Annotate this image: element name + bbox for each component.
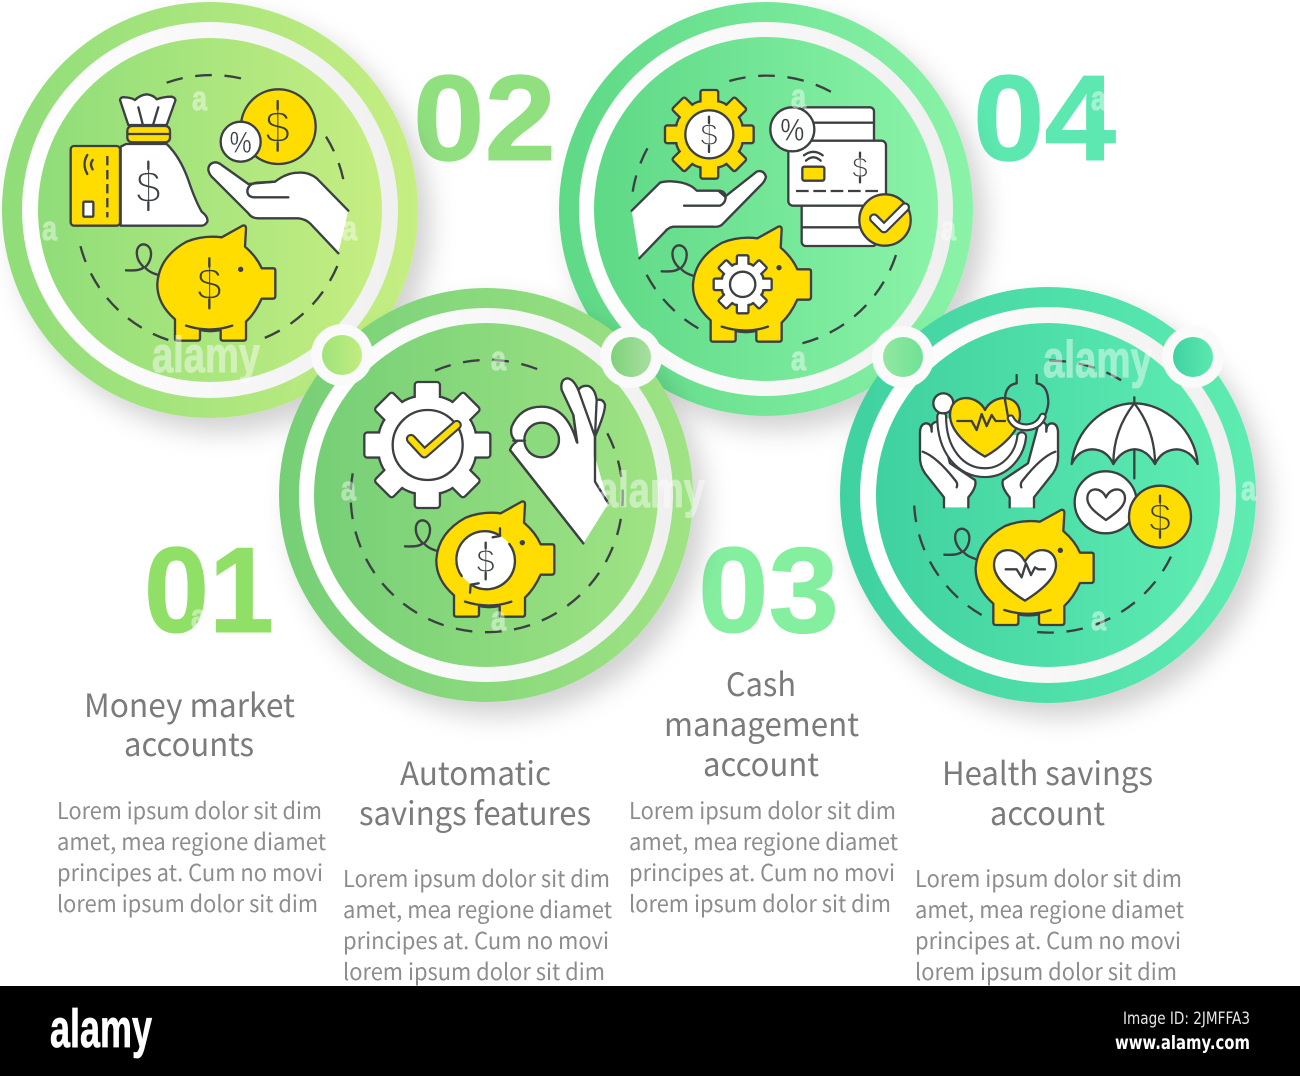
- text block: column 1: amet, mea regione diamet: [57, 823, 326, 857]
- watermarks: a: [491, 600, 507, 638]
- heading: money market accounts: Money market: [84, 681, 295, 727]
- icon: gear with check, OK hand, piggy bank: $: [476, 544, 495, 581]
- number 03: 03: [698, 522, 839, 658]
- watermarks: a: [1091, 600, 1107, 638]
- icon: gear with check, OK hand, piggy bank: [351, 360, 623, 632]
- text block: column 2: lorem ipsum dolor sit dim: [343, 953, 605, 987]
- text block: column 3: lorem ipsum dolor sit dim: [629, 885, 891, 919]
- footer image id: Image ID: 2JMFFA3: [1123, 1009, 1250, 1029]
- watermarks: a: [491, 340, 507, 378]
- text block: column 3: Lorem ipsum dolor sit dim: [629, 792, 896, 826]
- footer website: www.alamy.com: [1115, 1032, 1250, 1054]
- number 01: 01: [144, 522, 274, 658]
- connector dot: 4 end: [1162, 326, 1224, 388]
- text block: column 1: [57, 792, 326, 919]
- text block: column 3: principes at. Cum no movi: [629, 854, 895, 888]
- icon: savings, bag, card, coin, hand, piggy bank: $: [265, 102, 290, 153]
- connector dot: 1 to 2: [311, 324, 373, 386]
- text block: column 2: Lorem ipsum dolor sit dim: [343, 860, 610, 894]
- heading: health savings account: [942, 749, 1153, 835]
- heading: automatic savings features: Automatic: [400, 749, 551, 795]
- icon: savings, bag, card, coin, hand, piggy bank: $: [136, 161, 161, 212]
- text block: column 4: lorem ipsum dolor sit dim: [915, 953, 1177, 987]
- icon: savings, bag, card, coin, hand, piggy bank: %: [230, 126, 252, 159]
- panel: cash management account circle: [559, 2, 973, 416]
- icon: gear, hand, cards, piggy bank: %: [780, 112, 804, 148]
- text block: column 1: lorem ipsum dolor sit dim: [57, 885, 318, 919]
- heading: cash management account: account: [703, 740, 819, 786]
- watermarks: a: [1091, 80, 1107, 118]
- footer bar: [0, 986, 1300, 1076]
- icon: gear, hand, cards, piggy bank: $: [852, 153, 868, 185]
- watermarks: alamy: [152, 327, 260, 383]
- text block: column 4: Lorem ipsum dolor sit dim: [915, 860, 1182, 894]
- icon: hands, heart, stethoscope, umbrella, coins, piggy bank: $: [1149, 496, 1171, 540]
- text block: column 1: principes at. Cum no movi: [57, 854, 323, 888]
- connector dot: 3 to 4: [872, 326, 934, 388]
- text block: column 4: [915, 860, 1184, 987]
- panel: automatic savings features circle: [279, 288, 693, 702]
- heading: money market accounts: [84, 681, 295, 766]
- heading: cash management account: management: [664, 700, 859, 746]
- text block: column 2: [343, 860, 612, 987]
- text block: column 3: [629, 792, 898, 919]
- panel: health savings account circle: [840, 287, 1256, 703]
- panel: money market accounts circle: [2, 2, 418, 418]
- watermarks: alamy: [597, 462, 705, 518]
- watermarks: a: [341, 470, 357, 508]
- text block: column 2: amet, mea regione diamet: [343, 891, 612, 925]
- heading: money market accounts: accounts: [124, 720, 254, 766]
- icon: savings, bag, card, coin, hand, piggy bank: [71, 75, 348, 341]
- watermarks: a: [191, 598, 207, 636]
- heading: health savings account: Health savings: [942, 749, 1153, 795]
- heading: automatic savings features: savings features: [359, 789, 591, 835]
- icon: hands, heart, stethoscope, umbrella, coins, piggy bank: [914, 361, 1198, 633]
- text block: column 4: amet, mea regione diamet: [915, 891, 1184, 925]
- text block: column 2: principes at. Cum no movi: [343, 922, 609, 956]
- number 04: 04: [973, 50, 1116, 186]
- watermarks: [42, 78, 1257, 638]
- watermarks: alamy: [1043, 331, 1152, 389]
- watermarks: a: [941, 210, 957, 248]
- watermarks: a: [791, 78, 807, 116]
- watermarks: a: [1241, 470, 1257, 508]
- connector dot: 2 to 3: [600, 326, 662, 388]
- watermarks: a: [791, 340, 807, 378]
- text block: column 1: Lorem ipsum dolor sit dim: [57, 792, 322, 826]
- icon: gear, hand, cards, piggy bank: [632, 76, 911, 345]
- heading: automatic savings features: [359, 749, 591, 835]
- heading: cash management account: [664, 660, 859, 786]
- icon: savings, bag, card, coin, hand, piggy bank: $: [197, 258, 222, 309]
- heading: cash management account: Cash: [726, 660, 796, 706]
- watermarks: a: [192, 80, 208, 118]
- text block: column 4: principes at. Cum no movi: [915, 922, 1181, 956]
- footer logo: alamy: [50, 999, 152, 1059]
- watermarks: a: [42, 210, 58, 248]
- number 02: 02: [413, 50, 556, 186]
- text block: column 3: amet, mea regione diamet: [629, 823, 898, 857]
- heading: health savings account: account: [990, 789, 1105, 835]
- watermarks: a: [342, 210, 358, 248]
- icon: gear, hand, cards, piggy bank: $: [700, 117, 718, 153]
